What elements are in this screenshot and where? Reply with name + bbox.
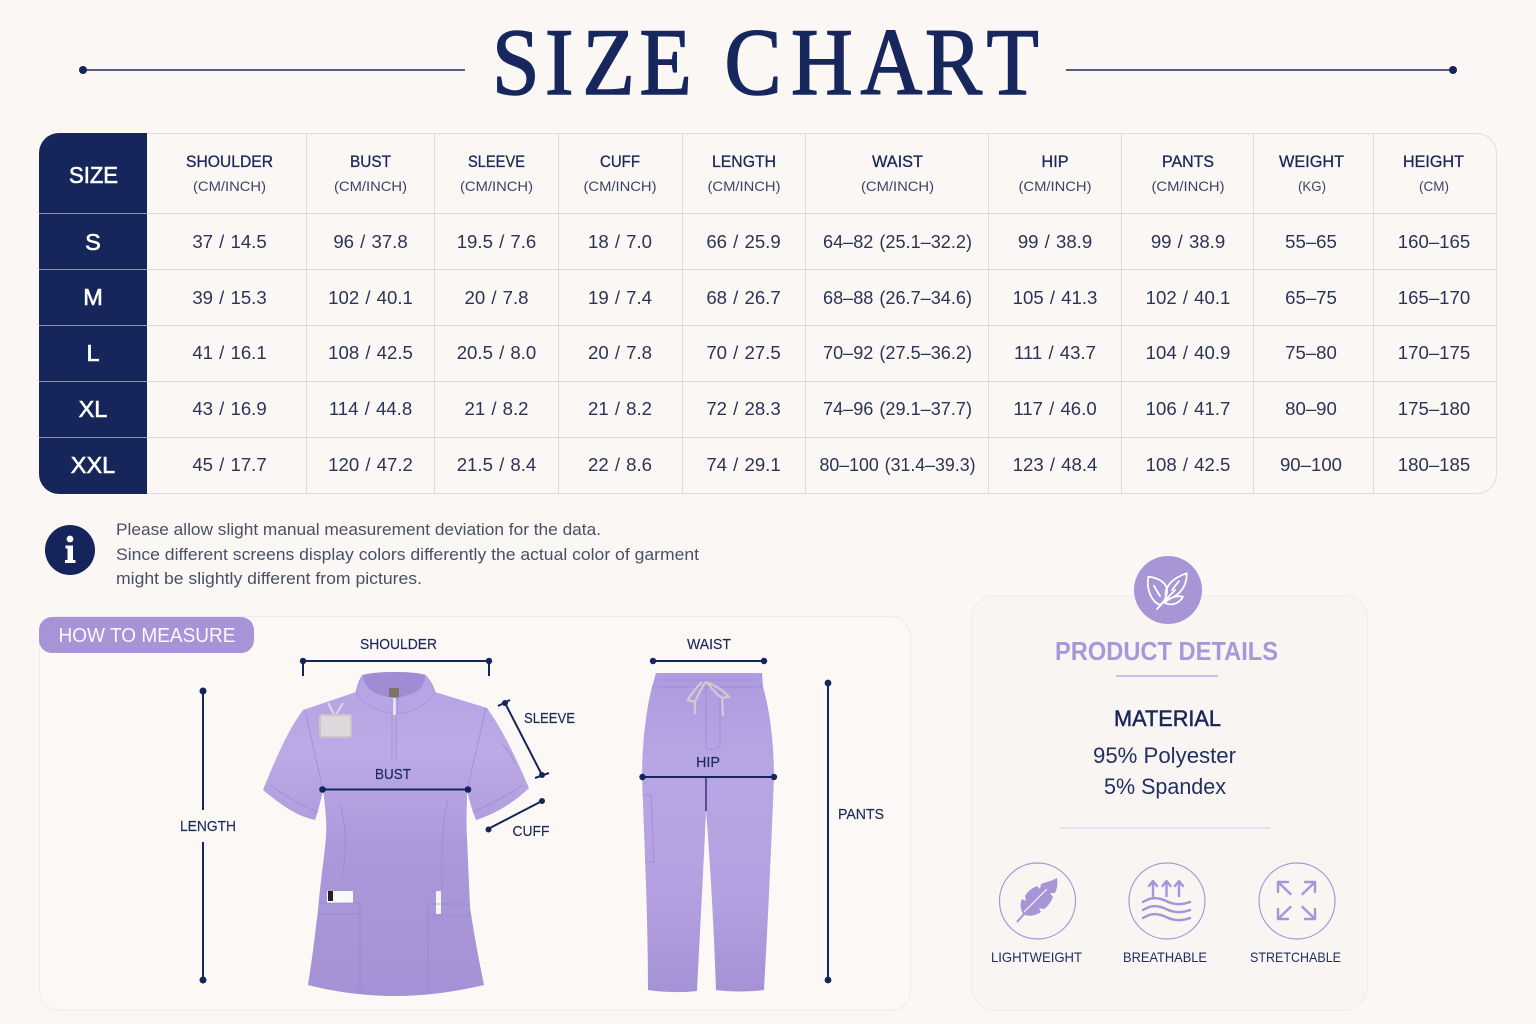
- table row: M: 39 / 15.3: [192, 287, 267, 308]
- table header row: (CM/INCH): [193, 178, 266, 194]
- table row: XL: 21 / 8.2: [464, 398, 529, 419]
- table header row: (CM/INCH): [460, 178, 533, 194]
- panel: product details: [972, 556, 1368, 1010]
- table row: XXL: 74 / 29.1: [706, 454, 781, 475]
- note text: Since different screens display colors differently the actual color of garment: [116, 545, 699, 564]
- table row: M: 68 / 26.7: [706, 287, 781, 308]
- material text: [1093, 706, 1236, 799]
- measure: sleeve: SLEEVE: [524, 711, 575, 727]
- icon: leaves: [1134, 556, 1202, 624]
- table row: L: [86, 340, 1470, 366]
- table row: L: 20 / 7.8: [588, 342, 652, 363]
- table row: L: L: [86, 340, 100, 366]
- table header row: (CM/INCH): [1152, 178, 1224, 194]
- table row: XXL: 45 / 17.7: [192, 454, 267, 475]
- table header row: (CM/INCH): [708, 178, 780, 194]
- table row: L: 170–175: [1398, 342, 1470, 363]
- table row: XL: 21 / 8.2: [588, 398, 652, 419]
- measure: hip: [639, 755, 777, 780]
- table row: S: 160–165: [1398, 231, 1470, 252]
- feature: stretchable: [1250, 863, 1341, 965]
- table row: XXL: 120 / 47.2: [328, 454, 413, 475]
- table header row: [69, 153, 1464, 194]
- table row: XL: 106 / 41.7: [1146, 398, 1230, 419]
- table row: XL: 114 / 44.8: [329, 398, 412, 419]
- measure: cuff: [486, 798, 550, 840]
- measure: sleeve: [498, 700, 575, 778]
- table row: L: 111 / 43.7: [1014, 342, 1096, 363]
- icon: info: [45, 525, 95, 575]
- table header row: (KG): [1298, 178, 1326, 194]
- table header row: SIZE: [69, 162, 118, 188]
- table row: M: 20 / 7.8: [464, 287, 529, 308]
- table row: XXL: 21.5 / 8.4: [457, 454, 536, 475]
- table row: XXL: 90–100: [1280, 454, 1342, 475]
- material text: 5% Spandex: [1104, 774, 1227, 799]
- measure: hip: HIP: [696, 755, 720, 771]
- table header row: (CM): [1419, 178, 1449, 194]
- measure: pants: PANTS: [838, 807, 884, 823]
- table row: M: 102 / 40.1: [328, 287, 413, 308]
- collar band: [356, 675, 435, 714]
- table row: M: 102 / 40.1: [1146, 287, 1230, 308]
- table row: M: [83, 284, 1470, 310]
- table row: L: 108 / 42.5: [328, 342, 413, 363]
- id badge: [320, 703, 351, 737]
- badge: how to measure: [39, 617, 254, 653]
- table header row: (CM/INCH): [584, 178, 656, 194]
- table row: S: 55–65: [1285, 231, 1337, 252]
- table row: L: 70 / 27.5: [706, 342, 781, 363]
- table header row: LENGTH: [712, 153, 776, 171]
- table row: M: 105 / 41.3: [1013, 287, 1097, 308]
- size chart table: [39, 133, 1497, 494]
- table header row: WAIST: [872, 153, 923, 171]
- measure: waist: [650, 637, 767, 664]
- title: SIZE CHART: [492, 9, 1039, 115]
- collar inner: [363, 672, 425, 700]
- table header row: CUFF: [600, 153, 640, 171]
- table row: XXL: 22 / 8.6: [588, 454, 652, 475]
- table row: S: 64–82 (25.1–32.2): [823, 231, 972, 252]
- table row: XL: 80–90: [1285, 398, 1337, 419]
- table header row: (CM/INCH): [861, 178, 934, 194]
- table row: XL: [79, 396, 1470, 422]
- table row: XXL: 180–185: [1398, 454, 1470, 475]
- badge: how to measure: HOW TO MEASURE: [58, 625, 236, 647]
- zipper: [389, 688, 399, 761]
- measure: shoulder: [300, 637, 492, 676]
- measure: pants: [825, 680, 884, 983]
- waistband and fly: [652, 680, 763, 749]
- table row: M: 65–75: [1285, 287, 1337, 308]
- table row: S: 37 / 14.5: [192, 231, 267, 252]
- table row: S: 96 / 37.8: [333, 231, 408, 252]
- table header row: SLEEVE: [468, 153, 525, 171]
- table row: S: 18 / 7.0: [588, 231, 652, 252]
- table row: XL: 175–180: [1398, 398, 1470, 419]
- feature: breathable: BREATHABLE: [1123, 949, 1207, 965]
- material text: MATERIAL: [1114, 706, 1221, 731]
- table header row: (CM/INCH): [1018, 178, 1092, 194]
- table row: S: 99 / 38.9: [1151, 231, 1225, 252]
- table row: M: 165–170: [1398, 287, 1470, 308]
- material text: 95% Polyester: [1093, 743, 1236, 768]
- garment seams: [270, 708, 522, 890]
- drawstring: [688, 682, 729, 716]
- table row: XL: 43 / 16.9: [192, 398, 267, 419]
- scrub top illustration: [263, 672, 529, 996]
- feature: breathable: [1123, 863, 1207, 965]
- measure: bust: [319, 767, 471, 793]
- trousers illustration: [642, 673, 774, 992]
- table row: XXL: 108 / 42.5: [1146, 454, 1230, 475]
- table header row: WEIGHT: [1279, 153, 1344, 171]
- table row: M: 19 / 7.4: [588, 287, 652, 308]
- table row: XL: XL: [79, 396, 107, 422]
- heading: product details: PRODUCT DETAILS: [1055, 636, 1278, 666]
- table row: S: 99 / 38.9: [1018, 231, 1092, 252]
- measure: length: [180, 688, 236, 984]
- table row: M: M: [83, 284, 103, 310]
- right pocket: [428, 891, 471, 994]
- side pocket: [642, 795, 654, 862]
- table row: XL: 72 / 28.3: [706, 398, 781, 419]
- table row: XXL: XXL: [71, 452, 115, 478]
- table row: XXL: [71, 452, 1470, 478]
- table row: L: 75–80: [1285, 342, 1337, 363]
- feature: stretchable: STRETCHABLE: [1250, 949, 1341, 965]
- left pocket: [318, 891, 360, 994]
- table row: S: [85, 229, 1470, 255]
- measure: bust: BUST: [375, 767, 411, 783]
- table row: XXL: 123 / 48.4: [1013, 454, 1097, 475]
- measure: shoulder: SHOULDER: [360, 637, 437, 653]
- measure: length: LENGTH: [180, 819, 236, 835]
- note text: Please allow slight manual measurement deviation for the data.: [116, 520, 601, 539]
- table row: L: 70–92 (27.5–36.2): [823, 342, 972, 363]
- table header row: (CM/INCH): [334, 178, 407, 194]
- table header row: SHOULDER: [186, 153, 273, 171]
- table row: S: 66 / 25.9: [706, 231, 781, 252]
- feature: lightweight: [991, 863, 1082, 965]
- table row: M: 68–88 (26.7–34.6): [823, 287, 972, 308]
- table row: XL: 74–96 (29.1–37.7): [823, 398, 972, 419]
- panel: how to measure: [39, 616, 910, 1010]
- table header row: HIP: [1042, 153, 1068, 171]
- title: [79, 9, 1457, 115]
- table header row: PANTS: [1162, 153, 1214, 171]
- table row: S: 19.5 / 7.6: [457, 231, 536, 252]
- table row: L: 104 / 40.9: [1146, 342, 1230, 363]
- table row: L: 41 / 16.1: [192, 342, 267, 363]
- table row: S: S: [85, 229, 101, 255]
- note text: [116, 520, 699, 588]
- table header row: BUST: [350, 153, 391, 171]
- note text: might be slightly different from pictures.: [116, 569, 422, 588]
- measure: waist: WAIST: [687, 637, 731, 653]
- table row: XXL: 80–100 (31.4–39.3): [820, 454, 976, 475]
- table row: L: 20.5 / 8.0: [457, 342, 536, 363]
- feature: lightweight: LIGHTWEIGHT: [991, 949, 1082, 965]
- table row: XL: 117 / 46.0: [1013, 398, 1097, 419]
- measure: cuff: CUFF: [512, 824, 550, 840]
- table header row: HEIGHT: [1403, 153, 1464, 171]
